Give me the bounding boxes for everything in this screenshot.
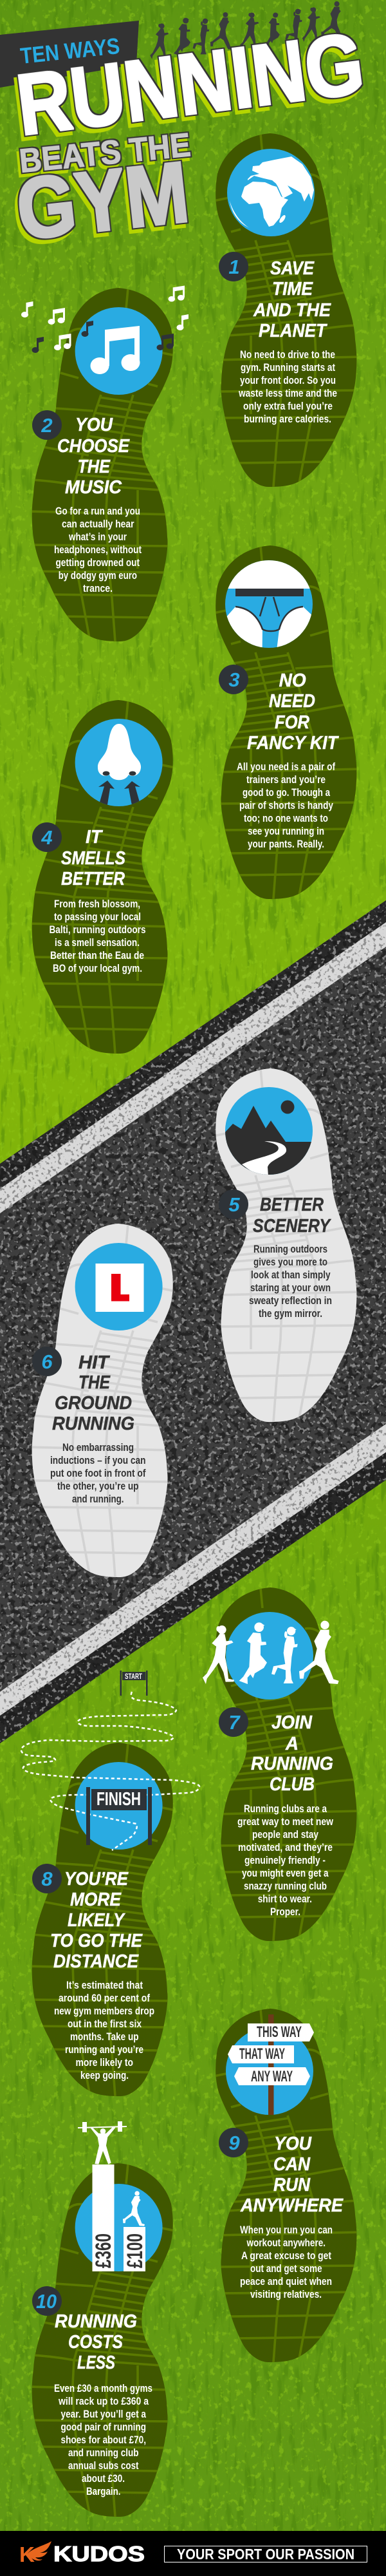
heading 2 (57, 415, 130, 498)
title block (0, 1, 369, 258)
heading 6: THE (78, 1372, 111, 1393)
body text 9: peace and quiet when (240, 2275, 332, 2287)
body text 5: gives you more to (253, 1256, 327, 1268)
heading 4: SMELLS (61, 848, 126, 869)
body text 1: gym. Running starts at (241, 361, 335, 374)
body text 6: and running. (72, 1493, 124, 1505)
body text 4: Better than the Eau de (50, 949, 144, 961)
panel: tip 7 join a running club (203, 1587, 363, 1941)
panel: tip 9 you can run anywhere (214, 2009, 363, 2362)
heading 3: NO (279, 670, 306, 691)
shoe print 4 (26, 700, 175, 1054)
logo: Kudos: KUDOS (53, 2542, 145, 2566)
body text 6: inductions – if you can (50, 1454, 145, 1466)
number badge 8: 8 (41, 1868, 53, 1890)
icon: underpants (225, 559, 315, 650)
icon: finish sign: FINISH (96, 1789, 141, 1810)
body text 1: waste less time and the (238, 387, 337, 399)
body text 3: pair of shorts is handy (239, 799, 333, 811)
body text 10: annual subs cost (68, 2459, 139, 2472)
body text 1 (238, 348, 337, 425)
body text 7 (237, 1803, 334, 1918)
icon: start sign: START (125, 1672, 142, 1681)
number badge 10: 10 (36, 2290, 57, 2313)
number badge 10 (32, 2286, 62, 2316)
icon: signpost: THAT WAY (239, 2045, 285, 2063)
body text 5: Running outdoors (253, 1243, 327, 1255)
body text 3: All you need is a pair of (237, 761, 335, 773)
body text 10: Even £30 a month gyms (54, 2382, 152, 2394)
heading 2: YOU (75, 415, 113, 435)
shoe print 7 (214, 1587, 363, 1941)
body text 6 (50, 1441, 146, 1505)
panel: tip 1 save time and the planet (214, 133, 363, 487)
body text 9: A great excuse to get (241, 2249, 331, 2262)
heading 5 (253, 1195, 331, 1236)
body text 2: can actually hear (62, 518, 134, 530)
heading 7: JOIN (271, 1712, 313, 1733)
body text 5: the gym mirror. (259, 1307, 322, 1320)
body text 3: your pants. Really. (248, 838, 324, 850)
body text 9: workout anywhere. (246, 2237, 326, 2249)
number badge 3 (219, 665, 248, 694)
shoe print 6 (26, 1224, 175, 1577)
number badge 8 (32, 1864, 62, 1893)
heading 9 (240, 2134, 344, 2216)
title banner: TEN WAYS (19, 33, 121, 69)
heading 9: YOU (274, 2134, 312, 2154)
body text 8: It’s estimated that (66, 1979, 143, 1991)
heading 8: TO GO THE (50, 1931, 143, 1951)
icon: music note (75, 307, 163, 395)
body text 8: out in the first six (68, 2018, 142, 2030)
icon: learner L plate (75, 1243, 163, 1331)
heading 6: GROUND (55, 1393, 132, 1414)
body text 3: good to go. Though a (243, 786, 330, 799)
body text 1: burning are calories. (244, 413, 331, 425)
number badge 6: 6 (41, 1350, 53, 1373)
heading 7 (251, 1712, 333, 1795)
heading 6: RUNNING (52, 1414, 134, 1434)
heading 10 (55, 2311, 137, 2373)
icon: nose (75, 719, 163, 809)
body text 4: to passing your local (54, 911, 141, 923)
icon: group of runners (203, 1612, 339, 1700)
body text 10: Bargain. (86, 2485, 121, 2497)
body text 7: you might even get a (242, 1867, 329, 1879)
heading 2: MUSIC (65, 477, 122, 498)
heading 2: THE (77, 457, 111, 477)
body text 9 (240, 2224, 333, 2300)
number badge 7: 7 (228, 1711, 241, 1734)
heading 3: NEED (269, 691, 315, 712)
heading 1: SAVE (270, 258, 315, 279)
body text 3 (237, 761, 335, 850)
number badge 3: 3 (228, 668, 240, 691)
logo: Kudos: K (19, 2543, 35, 2566)
body text 2: trance. (83, 582, 113, 594)
body text 8: keep going. (80, 2069, 129, 2081)
number badge 1 (219, 252, 248, 281)
heading 1: TIME (272, 279, 313, 299)
body text 10: good pair of running (60, 2421, 146, 2433)
heading 3: FANCY KIT (247, 733, 339, 753)
body text 7: snazzy running club (244, 1880, 327, 1892)
heading 4: IT (86, 827, 103, 848)
heading 8: MORE (70, 1889, 122, 1910)
body text 10: will rack up to £360 a (58, 2395, 149, 2407)
heading 5: BETTER (260, 1195, 324, 1215)
shoe print 10 (26, 2163, 175, 2517)
body text 5: look at than simply (251, 1269, 331, 1281)
icon: signpost (226, 2014, 314, 2115)
body text 7: shirt to wear. (258, 1893, 312, 1905)
body text 3: too; no one wants to (244, 812, 328, 824)
heading 1: PLANET (259, 321, 327, 341)
body text 10: year. But you’ll get a (60, 2408, 146, 2420)
number badge 2 (32, 410, 62, 440)
heading 10: LESS (77, 2353, 116, 2373)
body text 9: out and get some (250, 2262, 322, 2275)
icon: signpost: THIS WAY (257, 2023, 302, 2041)
shoe print 3 (214, 545, 363, 899)
body text 5: staring at your own (250, 1282, 331, 1294)
title: BEATS THE: BEATS THE (18, 126, 192, 180)
body text 6: the other, you’re up (57, 1480, 139, 1492)
body text 8: more likely to (76, 2056, 133, 2069)
body text 1: No need to drive to the (240, 348, 335, 361)
body text 10: and running club (68, 2447, 139, 2459)
heading 7: A (285, 1734, 299, 1754)
heading 4 (61, 827, 126, 889)
body text 2: getting drowned out (55, 556, 140, 569)
heading 4: BETTER (61, 869, 125, 889)
body text 7: genuinely friendly - (244, 1854, 326, 1866)
body text 7: great way to meet new (237, 1815, 334, 1828)
body text 7: Proper. (270, 1906, 300, 1918)
heading 6 (52, 1352, 134, 1434)
icon: dotted route from start to finish (21, 1692, 199, 1850)
heading 8 (50, 1869, 143, 1972)
heading 6: HIT (78, 1352, 110, 1373)
heading 3: FOR (275, 712, 309, 733)
heading 5: SCENERY (253, 1216, 331, 1236)
body text 4: is a smell sensation. (55, 936, 140, 949)
heading 8: LIKELY (68, 1910, 125, 1931)
runners silhouettes on title (150, 1, 345, 59)
tagline box: YOUR SPORT OUR PASSION (177, 2546, 354, 2562)
body text 10: about £30. (82, 2472, 125, 2485)
title banner (0, 21, 139, 88)
body text 5 (249, 1243, 332, 1320)
body text 4 (49, 898, 145, 974)
heading 1 (253, 258, 332, 341)
number badge 2: 2 (41, 414, 53, 437)
icon: cost bars: £360 (91, 2233, 116, 2268)
shoe print 8 (26, 1743, 175, 2096)
body text 6: No embarrassing (62, 1441, 134, 1454)
icon: globe (227, 149, 315, 236)
body text 9: visiting relatives. (250, 2288, 322, 2300)
panel: tip 8 you're more likely to go the distance (21, 1671, 199, 2096)
body text 3: trainers and you’re (246, 773, 326, 786)
body text 6: put one foot in front of (50, 1467, 146, 1479)
heading 8: DISTANCE (53, 1951, 139, 1972)
heading 1: AND THE (253, 300, 332, 321)
body text 4: BO of your local gym. (53, 962, 142, 974)
panel: tip 3 no need for fancy kit (214, 545, 363, 899)
icon: cost bars: £100 (123, 2233, 147, 2268)
footer (0, 2531, 386, 2576)
heading 7: RUNNING (251, 1754, 333, 1774)
icon: weightlifter (78, 2121, 127, 2164)
number badge 5 (219, 1189, 248, 1219)
panel: tip 6 hit the ground running (26, 1224, 175, 1577)
heading 9: CAN (273, 2154, 311, 2175)
body text 2: what’s in your (68, 531, 127, 543)
heading 2: CHOOSE (57, 436, 130, 457)
body text 7: motivated, and they’re (238, 1841, 333, 1853)
number badge 5: 5 (228, 1193, 240, 1216)
panel: tip 2 you choose the music (21, 285, 188, 641)
heading 9: ANYWHERE (240, 2195, 344, 2216)
body text 4: Balti, running outdoors (49, 923, 145, 936)
number badge 6 (32, 1347, 62, 1376)
body text 7: people and stay (252, 1828, 318, 1841)
shoe print 5 (214, 1068, 363, 1422)
heading 8: YOU’RE (64, 1869, 129, 1889)
heading 10: RUNNING (55, 2311, 137, 2332)
body text 8: running and you’re (65, 2043, 143, 2056)
body text 2 (54, 505, 142, 594)
icon: small runner (123, 2191, 145, 2226)
body text 10 (54, 2382, 152, 2497)
shoe print 2 (26, 288, 175, 641)
shoe print 1 (214, 133, 363, 487)
panel: tip 10 running costs less (26, 2121, 175, 2517)
heading 10: COSTS (68, 2332, 124, 2353)
number badge 1: 1 (228, 256, 240, 278)
body text 9: When you run you can (240, 2224, 333, 2236)
body text 8: months. Take up (70, 2031, 139, 2043)
number badge 9: 9 (228, 2132, 240, 2154)
body text 4: From fresh blossom, (54, 898, 140, 910)
body text 8: around 60 per cent of (59, 1992, 150, 2004)
body text 1: your front door. So you (240, 374, 336, 386)
body text 2: Go for a run and you (55, 505, 140, 517)
body text 5: sweaty reflection in (249, 1294, 332, 1307)
icon: start sign (120, 1671, 148, 1696)
number badge 4: 4 (41, 826, 53, 849)
floating music notes (21, 285, 188, 353)
number badge 7 (219, 1707, 248, 1737)
panel: tip 4 it smells better (26, 700, 175, 1054)
icon: signpost: ANY WAY (251, 2068, 293, 2085)
icon: finish sign (86, 1787, 152, 1845)
heading 7: CLUB (270, 1774, 315, 1795)
logo: Kudos (19, 2541, 145, 2566)
body text 1: only extra fuel you’re (243, 400, 333, 412)
heading 3 (247, 670, 339, 753)
icon: finish circle (75, 1762, 163, 1850)
body text 8 (54, 1979, 154, 2081)
icon: cost bars (75, 2164, 163, 2271)
body text 8: new gym members drop (54, 2005, 154, 2017)
shoe print 9 (214, 2009, 363, 2362)
number badge 9 (219, 2128, 248, 2157)
panel: tip 5 better scenery (214, 1068, 363, 1422)
body text 2: headphones, without (54, 544, 142, 556)
number badge 4 (32, 822, 62, 852)
icon: mountains and road (222, 1087, 313, 1177)
body text 2: by dodgy gym euro (59, 569, 137, 582)
background: diagonal asphalt road with white lines (0, 895, 386, 1752)
body text 7: Running clubs are a (244, 1803, 327, 1815)
body text 10: shoes for about £70, (60, 2434, 146, 2446)
title: GYM: GYM (12, 143, 194, 258)
body text 3: see you running in (248, 825, 324, 837)
heading 9: RUN (273, 2175, 311, 2195)
